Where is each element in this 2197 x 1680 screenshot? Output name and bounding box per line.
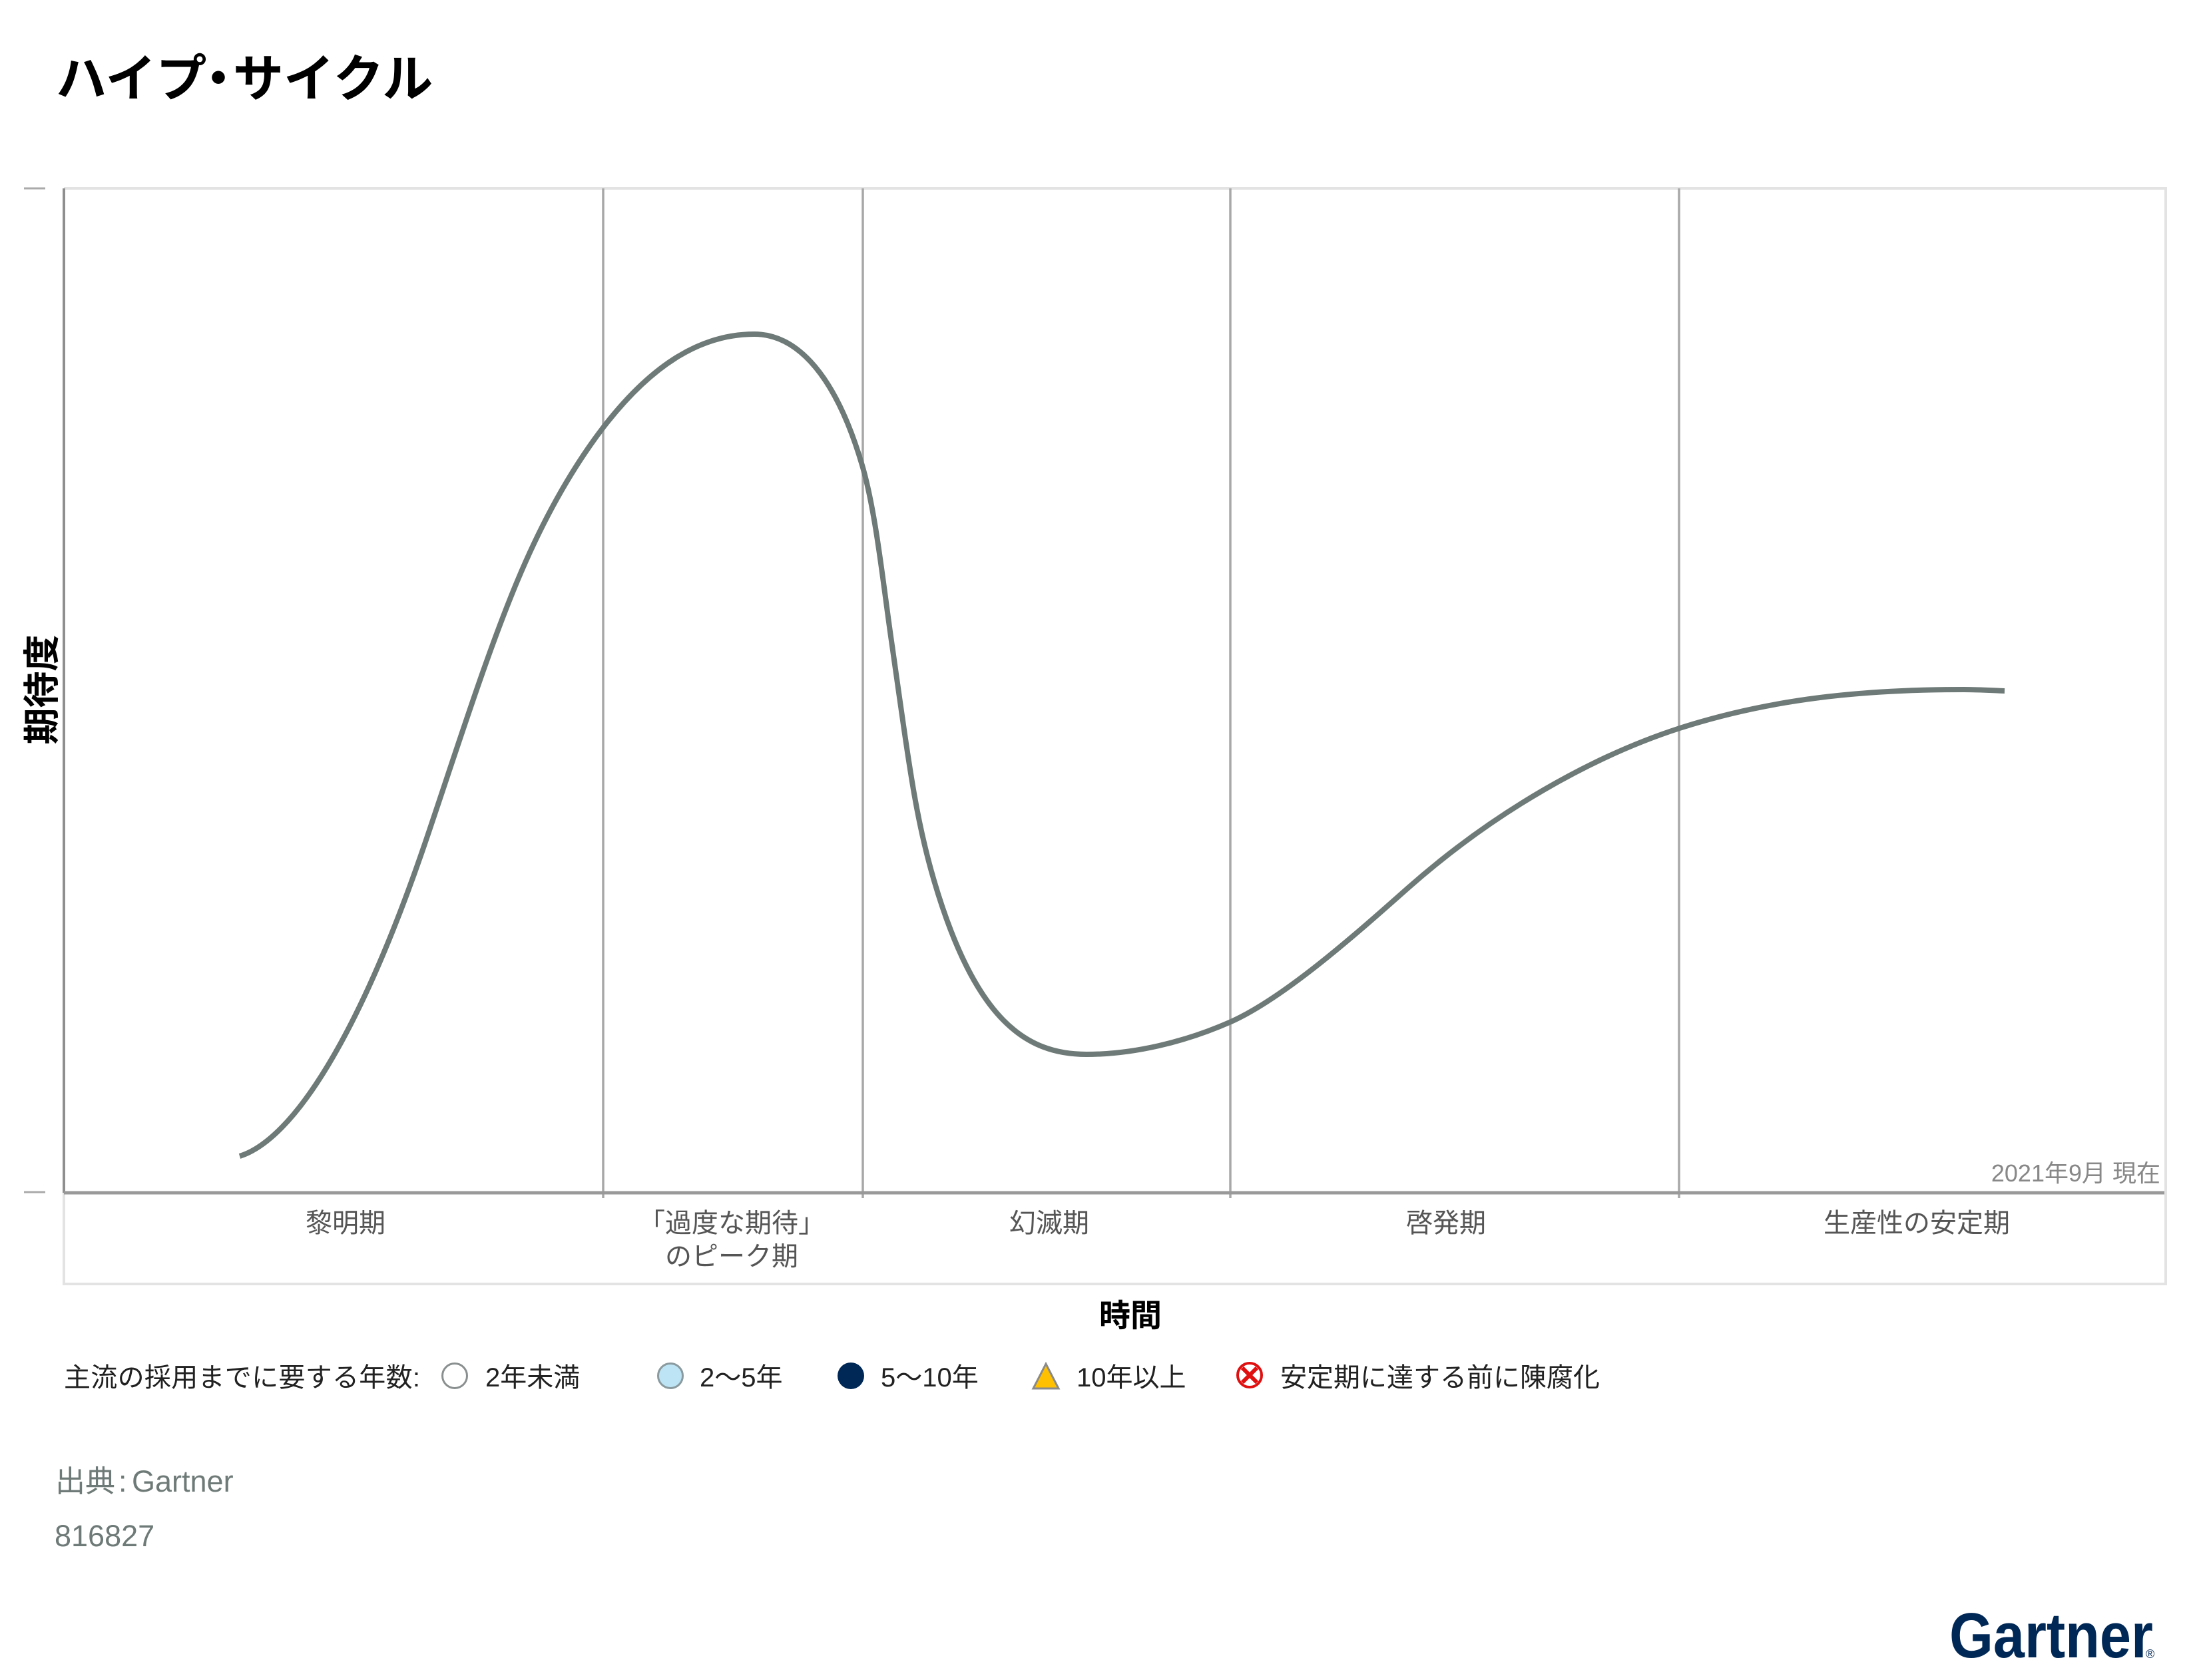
legend: [64, 1363, 1600, 1392]
phase labels: 「過度な期待」: [638, 1209, 825, 1238]
source: 出典: [55, 1464, 115, 1498]
phase labels: [306, 1209, 2010, 1271]
legend title: 主流の採用までに要する年数:: [64, 1363, 420, 1392]
legend icon: 2 to 5 years: [658, 1363, 683, 1388]
gartner logo: ®: [2146, 1647, 2154, 1661]
legend icon: obsolete before plateau: [1238, 1363, 1262, 1387]
document number: 816827: [55, 1519, 154, 1553]
source: Gartner: [132, 1464, 234, 1498]
legend text: over 10 years: 10年以上: [1077, 1363, 1186, 1392]
legend icon: under 2 years: [442, 1363, 467, 1388]
x axis label: 時間: [1099, 1298, 1162, 1333]
title: サイクル: [233, 51, 433, 108]
legend text: under 2 years: 2年未満: [485, 1363, 580, 1392]
gartner logo: Gartner: [1949, 1600, 2153, 1671]
phase labels: 黎明期: [306, 1209, 385, 1238]
legend text: 2 to 5 years: 2～5年: [700, 1363, 783, 1392]
phase labels: 生産性の安定期: [1824, 1209, 2010, 1238]
phase labels: のピーク期: [665, 1242, 798, 1271]
legend text: 5 to 10 years: 5～10年: [881, 1363, 979, 1392]
panel: hype cycle chart: [21, 188, 2166, 1333]
time axis baseline: [64, 1191, 2164, 1194]
title: ハイプ: [56, 51, 206, 108]
legend text: obsolete before plateau: 安定期に達する前に陳腐化: [1280, 1363, 1600, 1392]
phase labels: 啓発期: [1406, 1209, 1486, 1238]
legend icon: 5 to 10 years: [838, 1363, 864, 1389]
y axis label: 期待度: [21, 634, 63, 745]
date note: 2021年9月 現在: [1991, 1159, 2160, 1187]
hype curve: [240, 334, 2005, 1156]
source: :: [119, 1464, 127, 1498]
title: ・: [193, 51, 244, 108]
phase dividers: [603, 188, 1679, 1198]
chart frame: [24, 188, 2166, 1284]
legend icon: over 10 years: [1033, 1364, 1059, 1388]
phase labels: 幻滅期: [1009, 1209, 1089, 1238]
